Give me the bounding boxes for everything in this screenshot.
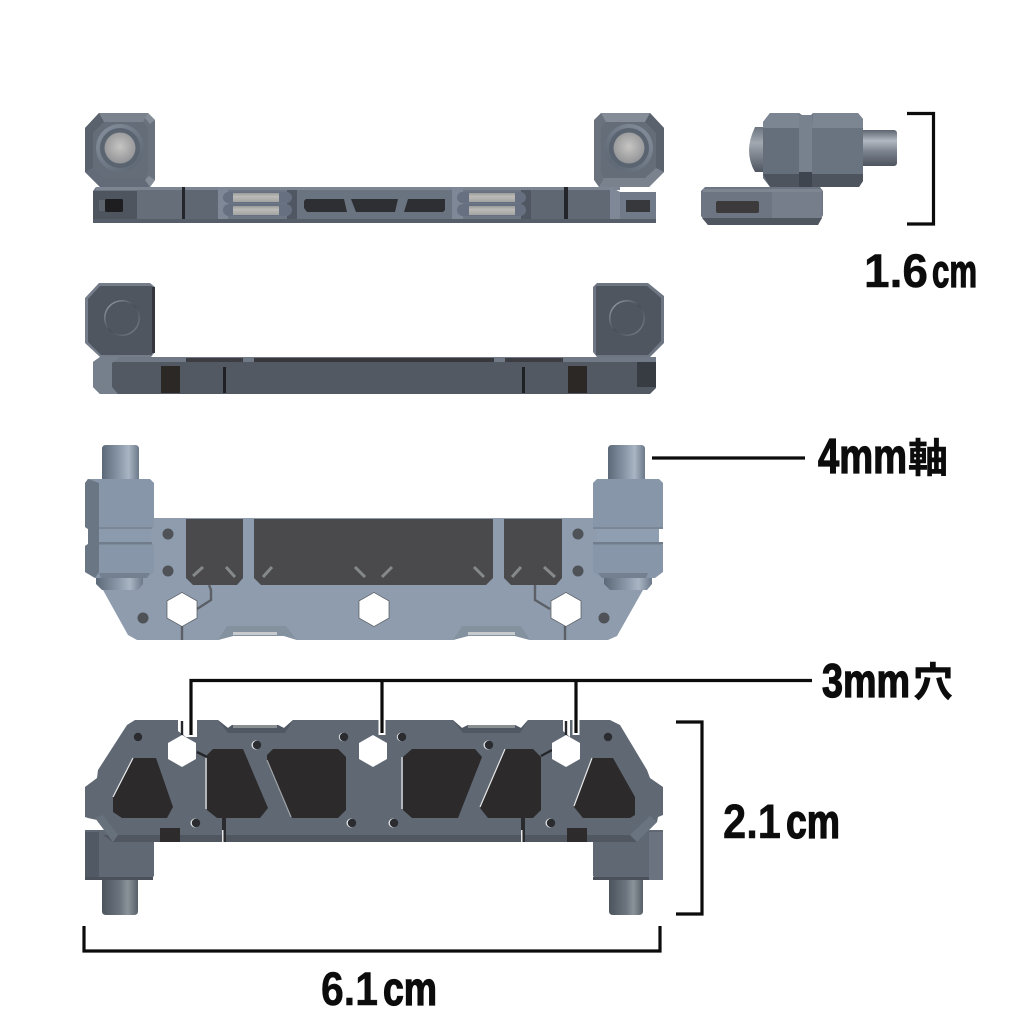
label: 1.6cm xyxy=(864,244,977,297)
bracket: width 6.1cm xyxy=(84,926,660,951)
panel: front view with shaft and hex holes xyxy=(85,445,663,640)
left end window xyxy=(99,199,123,212)
dark window center xyxy=(254,519,493,585)
right shaft xyxy=(608,445,645,480)
panel: top view of part xyxy=(85,113,664,223)
right end window xyxy=(626,200,650,212)
dark window right xyxy=(504,519,562,585)
label: 6.1cm xyxy=(321,962,437,1015)
left lower stub xyxy=(96,574,143,590)
right lower block xyxy=(593,830,663,880)
label: 6.1cm: cm xyxy=(383,962,437,1015)
right lower stub xyxy=(604,574,652,590)
right pin xyxy=(609,878,643,915)
label: 1.6cm: 1.6 xyxy=(864,244,928,297)
leader lines: 3mm holes xyxy=(191,680,812,735)
dark window 6 xyxy=(574,758,635,818)
right ball joint block xyxy=(594,113,664,187)
label: 4mm shaft leader line xyxy=(652,456,805,460)
side pin xyxy=(860,130,897,166)
label: 4mm shaft: 4mm xyxy=(818,430,907,484)
corner bevels xyxy=(95,815,118,842)
left joint block xyxy=(85,479,154,578)
dark plate xyxy=(85,720,663,842)
label: 3mm hole: 3mm xyxy=(822,654,910,707)
top notch facets xyxy=(218,720,528,733)
label: 2.1cm xyxy=(723,796,840,849)
window highlights xyxy=(113,749,592,809)
dark window 1 xyxy=(113,758,173,818)
dark window 4 xyxy=(403,749,482,818)
plate holes xyxy=(138,528,610,624)
left shaft xyxy=(102,445,139,480)
window ticks xyxy=(193,567,555,577)
dark window left xyxy=(186,519,243,585)
side cylinder block xyxy=(763,113,863,187)
window 3 soft highlight xyxy=(267,760,291,817)
slits xyxy=(182,585,565,640)
left ball joint block xyxy=(85,113,155,187)
lower slots xyxy=(160,818,587,842)
panel: side view of part xyxy=(701,113,897,225)
dark window 3 xyxy=(267,749,346,818)
side bar xyxy=(701,187,823,225)
back bar xyxy=(93,357,656,394)
left back block xyxy=(85,283,155,357)
label: 2.1cm: 2.1 xyxy=(723,796,781,849)
label: 3mm hole: 穴 xyxy=(913,661,953,705)
dark window 2 xyxy=(207,749,268,818)
dark window 5 xyxy=(480,749,541,818)
screw holes xyxy=(134,733,612,827)
bracket: height 2.1cm xyxy=(676,722,702,914)
right hinge pills xyxy=(457,192,526,216)
label: 6.1cm: 6.1 xyxy=(321,962,378,1015)
plate lower strip xyxy=(103,835,644,842)
left pin xyxy=(102,878,138,915)
right back block xyxy=(593,283,664,357)
center windows xyxy=(304,199,445,212)
label: 4mm shaft: 軸 xyxy=(908,437,948,481)
panel: back view of part xyxy=(85,283,664,394)
leader halo: white edge around hole pointers xyxy=(191,720,576,737)
label: 2.1cm: cm xyxy=(786,796,840,849)
bracket: height 1.6cm xyxy=(907,114,934,224)
left lower block xyxy=(85,830,154,880)
left hinge pills xyxy=(223,192,292,216)
right joint block xyxy=(593,479,663,578)
long bar xyxy=(93,187,656,223)
light plate xyxy=(90,518,650,640)
slits near hexes xyxy=(182,721,566,757)
rear hex holes xyxy=(168,735,580,767)
screw hole highlights xyxy=(190,733,554,828)
front hex holes xyxy=(167,592,581,626)
top notch silver slivers xyxy=(233,725,515,728)
side dome xyxy=(749,127,765,172)
panel: rear view with windows xyxy=(85,720,663,915)
bottom notch facets xyxy=(218,626,530,640)
label: 1.6cm: cm xyxy=(932,245,977,297)
